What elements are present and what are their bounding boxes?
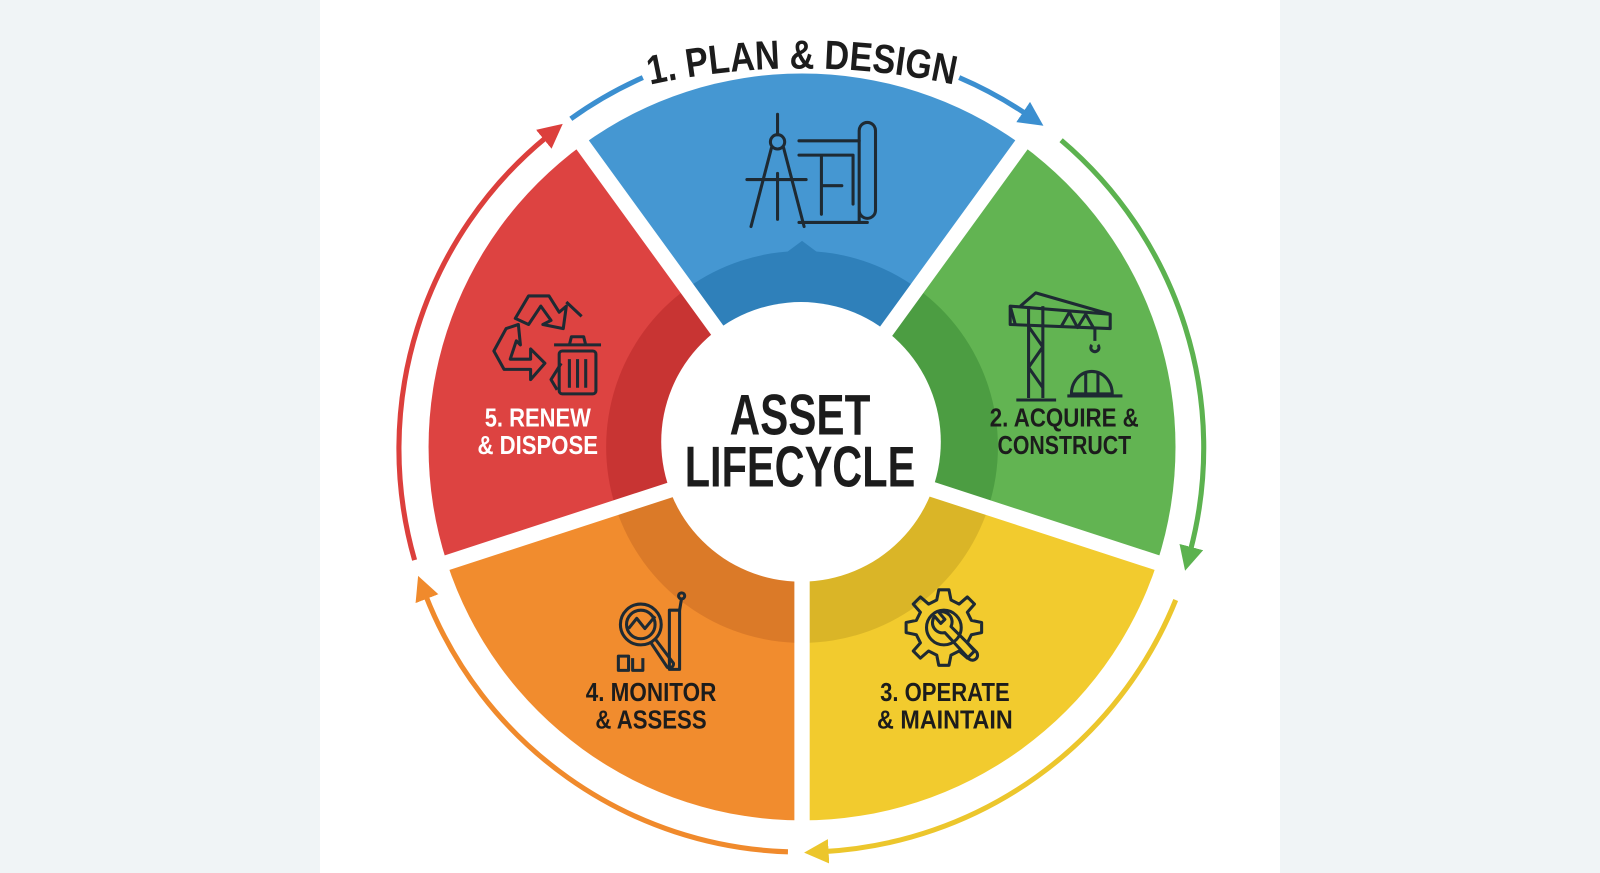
label: 2. ACQUIRE & CONSTRUCT: CONSTRUCT xyxy=(997,432,1131,460)
segment: acquire & construct (green) xyxy=(802,145,1176,562)
center title: ASSET xyxy=(730,384,870,448)
inner dark ring xyxy=(606,241,998,643)
center title xyxy=(685,384,915,500)
label: 4. MONITOR & ASSESS: 4. MONITOR xyxy=(586,679,716,707)
icon: compass and blueprint xyxy=(747,114,876,227)
arrow: yellow xyxy=(824,600,1176,852)
label: 3. OPERATE & MAINTAIN: & MAINTAIN xyxy=(877,707,1013,735)
arrow: green xyxy=(1061,140,1204,551)
segment: renew & dispose (red) xyxy=(429,145,802,562)
label: 4. MONITOR & ASSESS xyxy=(586,679,716,735)
segment: monitor & assess (orange) xyxy=(447,447,802,820)
icon: magnifier analytics xyxy=(618,593,685,670)
label: 2. ACQUIRE & CONSTRUCT: 2. ACQUIRE & xyxy=(990,405,1139,433)
label: 2. ACQUIRE & CONSTRUCT xyxy=(990,405,1139,460)
heading: 1. PLAN & DESIGN: 1. PLAN & DESIGN xyxy=(648,40,958,84)
center title: LIFECYCLE xyxy=(685,436,915,500)
label: 5. RENEW & DISPOSE: & DISPOSE xyxy=(478,432,598,460)
arrow: blue xyxy=(571,78,643,119)
label: 4. MONITOR & ASSESS: & ASSESS xyxy=(595,707,707,735)
label: 5. RENEW & DISPOSE: 5. RENEW xyxy=(485,405,592,433)
outer arrow ring xyxy=(399,78,1204,852)
center circle xyxy=(661,302,941,582)
label: 5. RENEW & DISPOSE xyxy=(478,405,598,460)
label: 3. OPERATE & MAINTAIN: 3. OPERATE xyxy=(880,679,1010,707)
segment: operate & maintain (yellow) xyxy=(802,447,1157,820)
icon: recycle and trash can xyxy=(494,296,601,394)
segment: plan & design (blue) xyxy=(583,73,1022,447)
label: 3. OPERATE & MAINTAIN xyxy=(877,679,1013,735)
arrow: orange xyxy=(426,595,788,852)
white panel xyxy=(320,0,1280,873)
icon: crane and hard hat xyxy=(1010,293,1122,400)
arrow: red xyxy=(399,137,547,560)
icon: gear and wrench xyxy=(906,590,982,665)
lifecycle wheel xyxy=(429,73,1176,832)
